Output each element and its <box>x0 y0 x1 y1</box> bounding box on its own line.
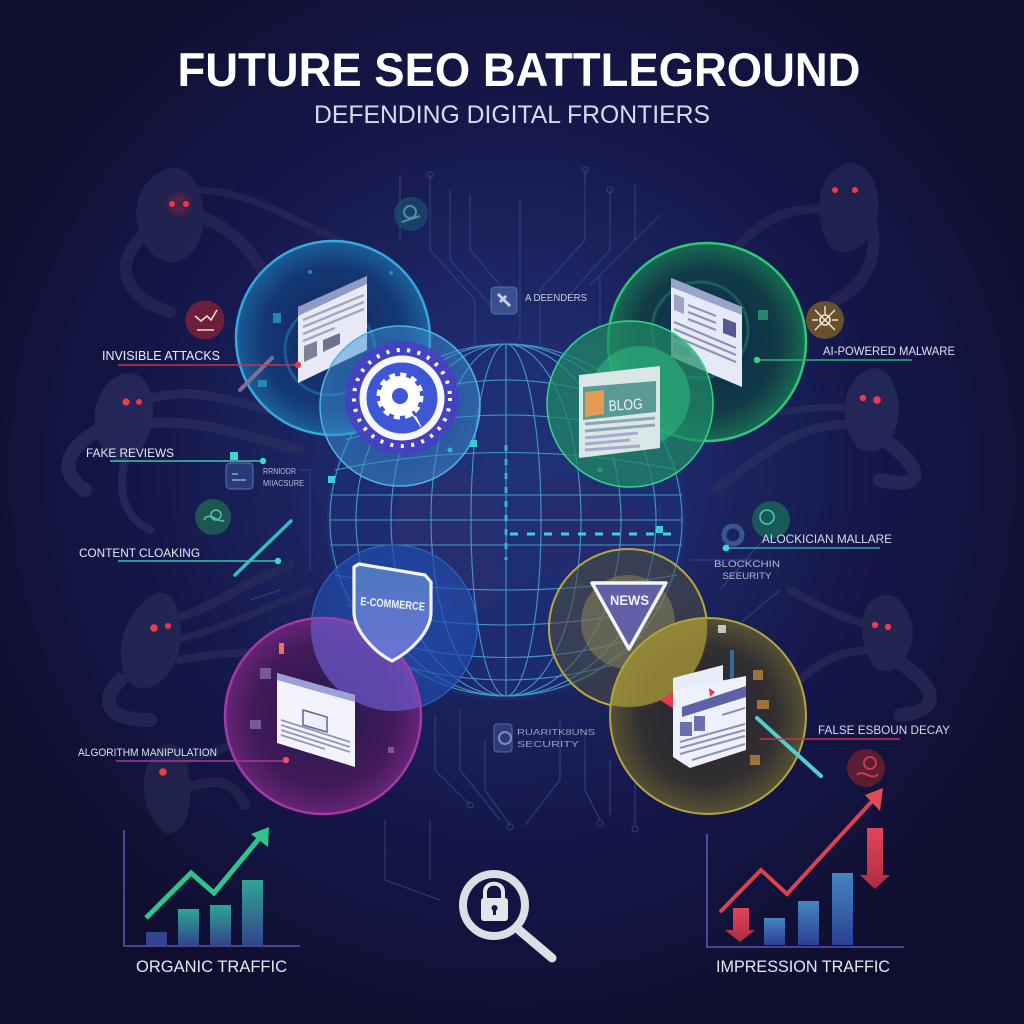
callout: decay: FALSE ESBOUN DECAY <box>818 725 950 737</box>
callout: fake reviews: RRNIODR <box>263 466 296 476</box>
chart: organic traffic <box>124 827 300 976</box>
bubble: purple with web page <box>224 616 422 816</box>
creature: lower right <box>790 590 930 715</box>
news triangle: NEWS <box>610 592 649 608</box>
callout: invisible attacks <box>102 300 301 368</box>
chart: impression traffic: IMPRESSION TRAFFIC <box>716 957 890 976</box>
bubble: e-commerce <box>311 545 477 711</box>
down arrow large <box>860 828 890 889</box>
callout: invisible attacks: INVISIBLE ATTACKS <box>102 349 220 363</box>
growth arrow <box>146 827 269 918</box>
label: blockchain security <box>714 559 780 582</box>
callout: ai-powered malware <box>754 301 955 363</box>
callout: content cloaking <box>79 499 291 575</box>
creature: middle left eyes <box>122 398 142 406</box>
label: bottom center security <box>494 724 595 752</box>
subtitle: DEFENDING DIGITAL FRONTIERS <box>314 101 710 129</box>
label: bottom center security: RUARITK8UNS <box>517 727 595 737</box>
web page window <box>298 276 367 383</box>
callout: fake reviews: FAKE REVIEWS <box>86 446 174 460</box>
creature: lower right eyes <box>872 622 891 630</box>
label: blockchain security: BLOCKCHIN <box>714 559 780 570</box>
creature: top left <box>126 169 350 312</box>
creature: top right eyes <box>832 187 858 193</box>
title: FUTURE SEO BATTLEGROUND <box>178 43 860 96</box>
creature: top left eyes <box>169 201 189 207</box>
bubble: yellow news <box>549 549 707 707</box>
web page window <box>277 673 355 767</box>
callout: decay <box>760 725 950 787</box>
bubble: green blog <box>547 321 713 487</box>
creature: middle right eyes <box>860 395 881 404</box>
chart: impression traffic <box>707 788 904 976</box>
icon: magnifier with lock <box>463 874 552 958</box>
blog card: BLOG <box>608 396 643 415</box>
callout: fake reviews <box>86 446 304 489</box>
bubble: yellow with newspapers <box>609 617 824 815</box>
callout: algorithm manipulation: ALGORITHM MANIPULATION <box>78 747 217 759</box>
creature: middle left <box>69 374 300 530</box>
callout: content cloaking: CONTENT CLOAKING <box>79 546 200 560</box>
globe <box>326 340 686 700</box>
creature: lower left <box>109 565 320 720</box>
bubble: gear <box>320 326 480 486</box>
creature: middle right <box>715 369 914 490</box>
defenders label: A DEENDERS <box>525 293 587 304</box>
callout: algorithm manipulation <box>78 747 289 763</box>
circuit traces <box>250 167 780 900</box>
callout: ai-powered malware: AI-POWERED MALWARE <box>823 346 955 358</box>
shield badge: E-COMMERCE <box>360 596 426 614</box>
newspapers <box>673 665 746 768</box>
bubble: green with web page <box>608 243 806 441</box>
down arrow small <box>725 908 755 942</box>
creature: bottom left <box>145 715 300 832</box>
label: bottom center security: SECURITY <box>517 739 579 749</box>
icon: top center badge <box>394 197 428 231</box>
creature: lower left eyes <box>150 623 171 632</box>
shield badge <box>354 564 431 661</box>
web page window <box>671 278 742 387</box>
defenders label <box>491 287 587 314</box>
news triangle <box>592 583 666 649</box>
icon: gear with cursor <box>379 375 421 427</box>
callout: fake reviews: MIIACSURE <box>263 478 304 488</box>
trend arrow <box>720 788 883 912</box>
callout: blockchain malware: ALOCKICIAN MALLARE <box>762 534 892 546</box>
creature: bottom left eye <box>159 768 167 776</box>
callout: blockchain malware <box>723 501 892 551</box>
creature: top right <box>735 164 878 300</box>
label: blockchain security: SEEURITY <box>722 571 772 582</box>
blog card <box>579 366 660 458</box>
chart: organic traffic: ORGANIC TRAFFIC <box>136 957 287 976</box>
bubble: blue with web page <box>236 241 430 435</box>
